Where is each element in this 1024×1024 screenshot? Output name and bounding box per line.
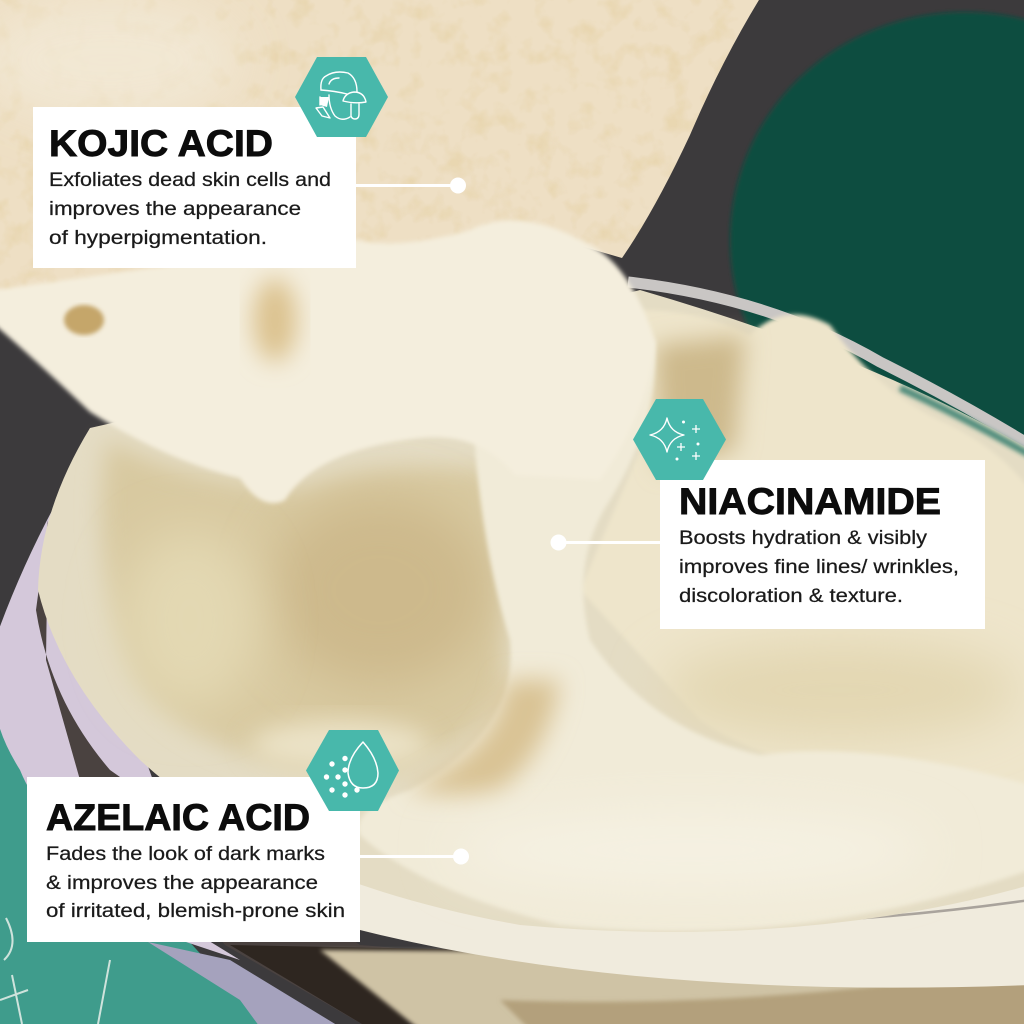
callout: kojic acid	[33, 57, 466, 268]
connector: azelaic acid	[355, 848, 469, 864]
icon: droplet hexagon	[306, 730, 399, 811]
icon: sparkle hexagon	[633, 399, 726, 480]
text: niacinamide description: discoloration & texture.	[679, 585, 903, 607]
heading: niacinamide: NIACINAMIDE	[679, 481, 941, 522]
icon: mushroom hexagon	[295, 57, 388, 137]
panel: azelaic acid text	[27, 777, 360, 942]
text: kojic acid description: Exfoliates dead skin cells and	[49, 169, 331, 191]
text: niacinamide description: improves fine lines/ wrinkles,	[679, 556, 959, 578]
heading: azelaic acid: AZELAIC ACID	[46, 797, 310, 838]
connector: kojic acid	[350, 178, 466, 194]
text: niacinamide description	[679, 527, 959, 607]
text: niacinamide description: Boosts hydration & visibly	[679, 527, 927, 549]
foam on sponge	[0, 220, 655, 503]
text: azelaic acid description: Fades the look of dark marks	[46, 843, 325, 865]
sponge	[0, 0, 759, 293]
text: azelaic acid description: of irritated, blemish-prone skin	[46, 900, 345, 922]
text: azelaic acid description: & improves the appearance	[46, 872, 318, 894]
panel: kojic acid text	[33, 107, 356, 268]
foam stream and foreground foam	[359, 340, 1024, 931]
callout: niacinamide	[550, 399, 985, 629]
text: azelaic acid description	[46, 843, 345, 922]
text: kojic acid description	[49, 169, 331, 249]
panel: niacinamide text	[660, 460, 985, 629]
connector: niacinamide	[550, 534, 662, 550]
left foam pool	[101, 440, 505, 775]
text: kojic acid description: improves the appearance	[49, 198, 301, 220]
right foam pool	[580, 310, 1024, 790]
heading: kojic acid: KOJIC ACID	[49, 123, 273, 164]
callout: azelaic acid	[27, 730, 469, 942]
text: kojic acid description: of hyperpigmentation.	[49, 227, 267, 249]
